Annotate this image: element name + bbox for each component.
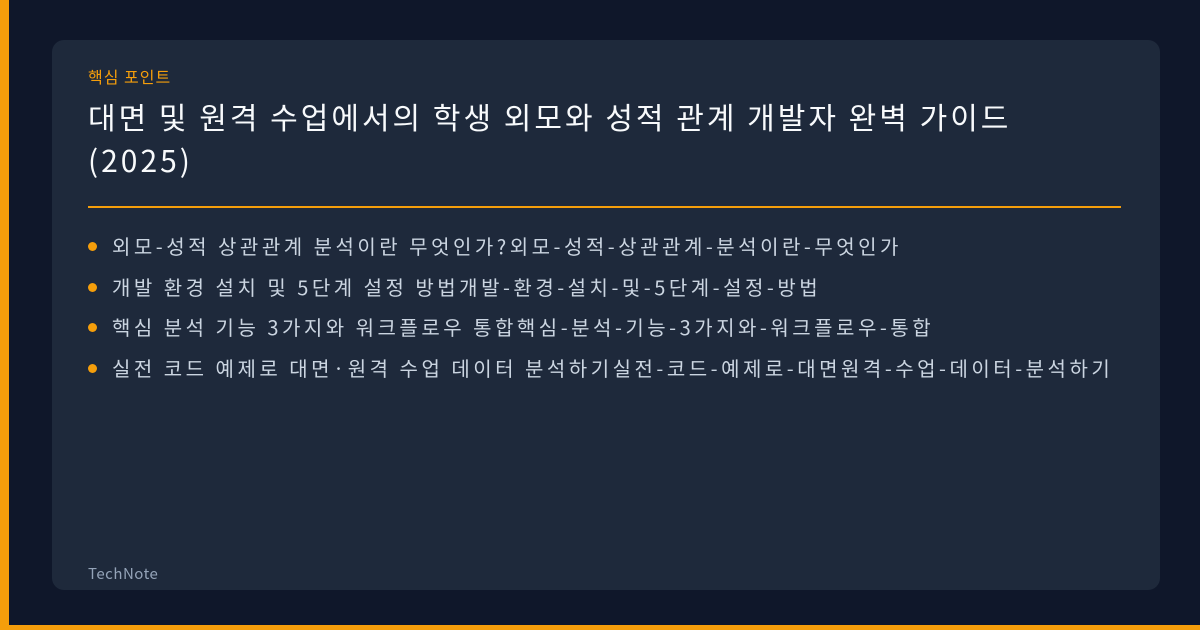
footer brand: TechNote (88, 563, 158, 584)
bullet list: 개발 환경 설치 및 5단계 설정 방법개발-환경-설치-및-5단계-설정-방법 (112, 272, 821, 300)
title: 대면 및 원격 수업에서의 학생 외모와 성적 관계 개발자 완벽 가이드 (2025) (88, 94, 1011, 181)
bullet list (88, 231, 1113, 382)
bullet list: 외모-성적 상관관계 분석이란 무엇인가?외모-성적-상관관계-분석이란-무엇인가 (112, 231, 902, 260)
bullet list: 실전 코드 예제로 대면·원격 수업 데이터 분석하기실전-코드-예제로-대면원격-수업-데이터-분석하기 (112, 352, 1113, 382)
kicker: 핵심 포인트 (88, 64, 171, 88)
bullet list: 핵심 분석 기능 3가지와 워크플로우 통합핵심-분석-기능-3가지와-워크플로우-통합 (112, 312, 934, 341)
